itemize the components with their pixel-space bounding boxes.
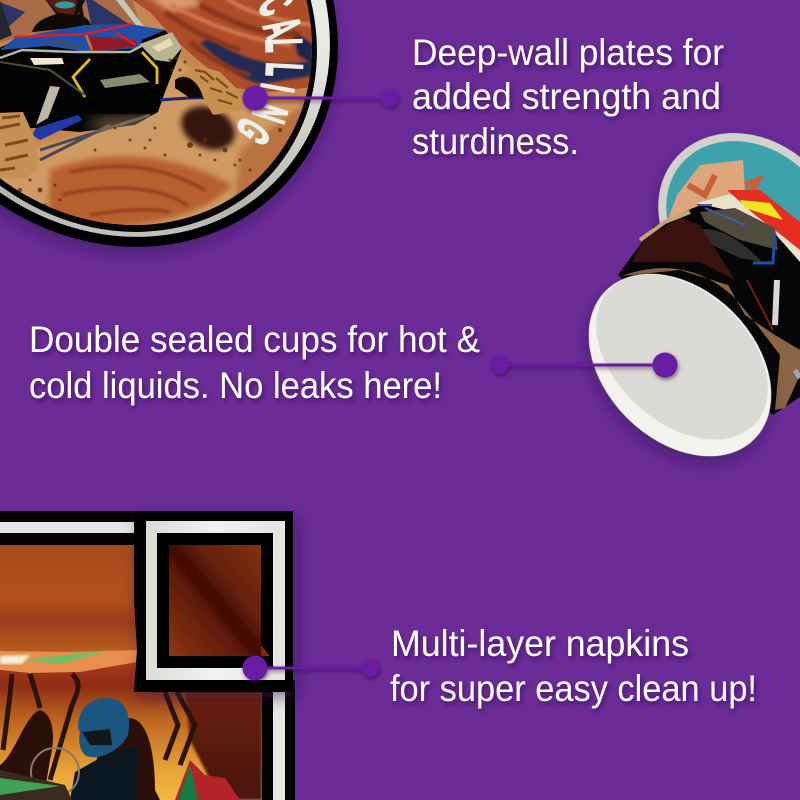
text: plates: sturdiness.: [412, 121, 579, 162]
dirt spray: [4, 56, 282, 208]
callout: napkin pointer: [242, 656, 379, 680]
driver body: [70, 745, 138, 800]
buggy right wheel: [175, 65, 243, 115]
plate title lettering: [238, 0, 304, 144]
plate copyright: ©BirthdayGalore.com: [66, 223, 119, 230]
hood green: [0, 778, 60, 795]
top left mountains: [0, 0, 142, 44]
napkin top border: [0, 511, 140, 545]
cup wall artwork: [618, 190, 800, 415]
canopy stripe: [25, 650, 110, 664]
roll bars: [3, 674, 195, 780]
cup rim: [622, 96, 800, 348]
text: cups: [29, 319, 480, 406]
sky streaks: [132, 0, 312, 92]
plate rim rings: [0, 0, 432, 341]
callout: cup pointer: [491, 352, 678, 378]
napkin right border: [262, 680, 295, 800]
cup inner scene: [666, 141, 800, 222]
dust over body: [88, 116, 176, 134]
hood right green: [178, 765, 198, 800]
buggy driver: [32, 0, 145, 32]
text: napkins: [390, 623, 757, 709]
buggy left wheel: [0, 112, 38, 178]
text: plates: [412, 32, 724, 162]
text: plates: added strength and: [412, 76, 721, 117]
text: plates: Deep-wall plates for: [412, 32, 724, 73]
text: napkins: for super easy clean up!: [390, 668, 757, 709]
seat right: [90, 718, 160, 800]
driver helmet: [78, 698, 129, 757]
hood right: [175, 760, 240, 800]
rear structure: [0, 0, 12, 42]
buggy canopy: [0, 650, 137, 673]
napkin right dark sky: [185, 690, 262, 800]
canopy glare: [0, 655, 30, 664]
folded corner: [134, 511, 293, 692]
cup base: [553, 238, 800, 492]
steering wheel: [31, 748, 79, 796]
hood left: [0, 770, 72, 800]
text: cups: Double sealed cups for hot &: [29, 319, 480, 360]
plate title lettering: L: [255, 61, 312, 78]
cup: [581, 132, 800, 470]
napkin: [0, 511, 295, 800]
ground: [0, 58, 304, 225]
text: cups: cold liquids. No leaks here!: [29, 365, 442, 406]
seat left: [0, 710, 53, 790]
napkin artwork: [0, 545, 262, 800]
buggy body: [0, 22, 204, 162]
cup base inner disk: [564, 242, 800, 472]
mountain shadow: [0, 0, 128, 26]
plate title lettering: L: [254, 37, 312, 53]
callout: plate pointer: [242, 86, 398, 110]
plate title lettering: A: [252, 10, 311, 45]
plate artwork: [0, 0, 312, 225]
wheel pit: [176, 102, 240, 154]
plate title lettering: N: [242, 97, 298, 129]
plate title lettering: I: [251, 80, 305, 96]
plate: [0, 0, 343, 260]
text: napkins: Multi-layer napkins: [391, 623, 689, 664]
plate title lettering: G: [227, 109, 281, 154]
